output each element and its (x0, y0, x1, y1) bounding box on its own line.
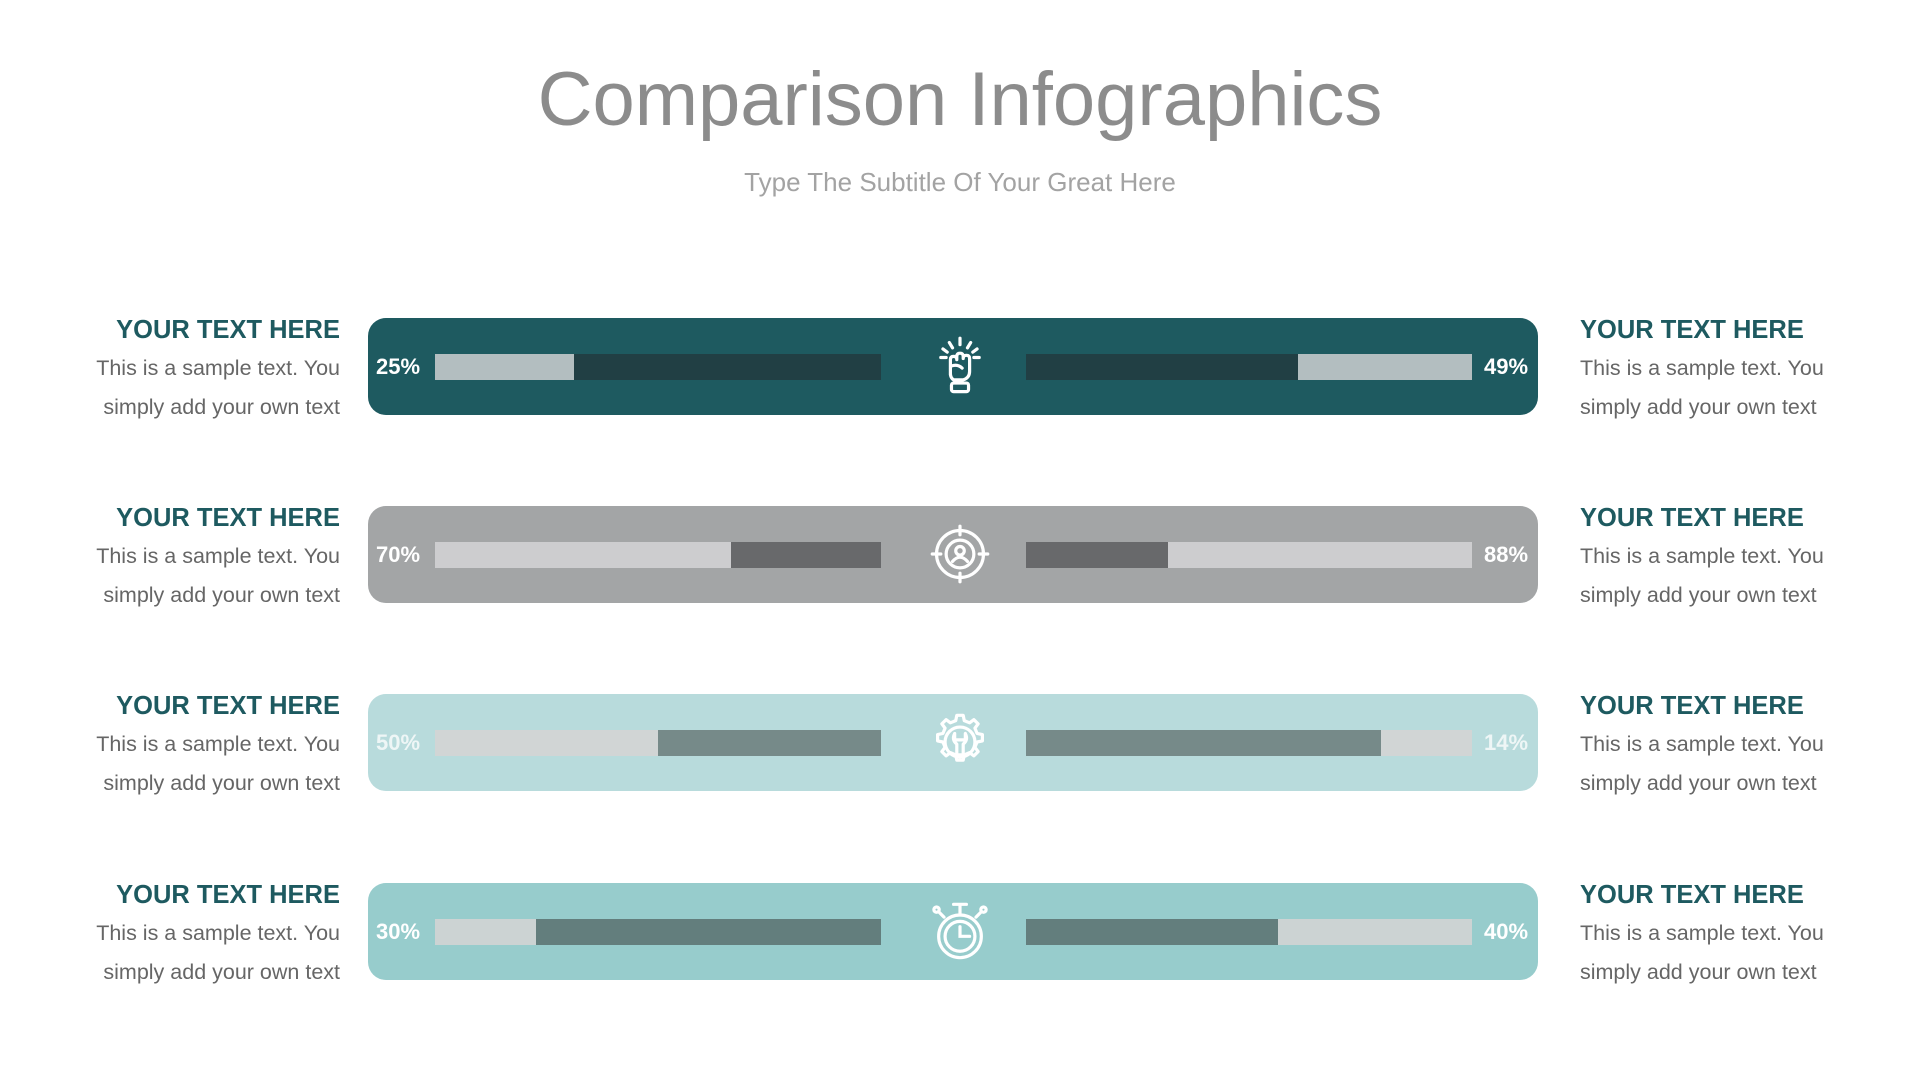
row 4 left text: This is a sample text. You (96, 921, 340, 945)
row 2 left text: simply add your own text (103, 583, 340, 607)
right percent: 40% (1484, 919, 1528, 944)
row 4 right text: YOUR TEXT HERE (1580, 881, 1804, 909)
row 2 right text (1580, 504, 1824, 607)
row 1 left text: This is a sample text. You (96, 356, 340, 380)
row 2 left text: This is a sample text. You (96, 544, 340, 568)
row 3 left text (96, 692, 340, 795)
row 1 left text (96, 316, 340, 419)
right percent: 88% (1484, 542, 1528, 567)
right percent: 49% (1484, 354, 1528, 379)
left bar (435, 542, 881, 568)
right percent: 14% (1484, 730, 1528, 755)
left bar (435, 730, 881, 756)
row 4 left text: YOUR TEXT HERE (116, 881, 340, 909)
row 3 right text: YOUR TEXT HERE (1580, 692, 1804, 720)
row 2 right text: This is a sample text. You (1580, 544, 1824, 568)
row 4 right text: This is a sample text. You (1580, 921, 1824, 945)
row 1 left text: simply add your own text (103, 395, 340, 419)
row 1 right text (1580, 316, 1824, 419)
row 3 left text: This is a sample text. You (96, 732, 340, 756)
left percent: 25% (376, 354, 420, 379)
row 2 left text: YOUR TEXT HERE (116, 504, 340, 532)
row 2 right text: YOUR TEXT HERE (1580, 504, 1804, 532)
left percent: 70% (376, 542, 420, 567)
icon: stopwatch (932, 902, 988, 960)
row 3 right text (1580, 692, 1824, 795)
row 1 right text: YOUR TEXT HERE (1580, 316, 1804, 344)
row 2 right text: simply add your own text (1580, 583, 1817, 607)
panel: row 1 (368, 318, 1538, 415)
icon: raised fist (939, 336, 981, 394)
icon: gear wrench (936, 714, 984, 762)
right bar (1026, 919, 1472, 945)
row 1 right text: This is a sample text. You (1580, 356, 1824, 380)
left bar (435, 919, 881, 945)
panel: row 3 (368, 694, 1538, 791)
row 4 right text: simply add your own text (1580, 960, 1817, 984)
row 4 left text (96, 881, 340, 984)
left percent: 30% (376, 919, 420, 944)
left bar (435, 354, 881, 380)
right bar (1026, 730, 1472, 756)
row 1 right text: simply add your own text (1580, 395, 1817, 419)
row 3 left text: YOUR TEXT HERE (116, 692, 340, 720)
icon: target person (930, 524, 990, 584)
row 3 left text: simply add your own text (103, 771, 340, 795)
row 3 right text: This is a sample text. You (1580, 732, 1824, 756)
row 2 left text (96, 504, 340, 607)
panel: row 2 (368, 506, 1538, 603)
panel: row 4 (368, 883, 1538, 980)
row 4 left text: simply add your own text (103, 960, 340, 984)
right bar (1026, 542, 1472, 568)
left percent: 50% (376, 730, 420, 755)
title: Comparison Infographics (538, 57, 1382, 142)
right bar (1026, 354, 1472, 380)
row 3 right text: simply add your own text (1580, 771, 1817, 795)
row 4 right text (1580, 881, 1824, 984)
subtitle: Type The Subtitle Of Your Great Here (744, 167, 1176, 197)
row 1 left text: YOUR TEXT HERE (116, 316, 340, 344)
